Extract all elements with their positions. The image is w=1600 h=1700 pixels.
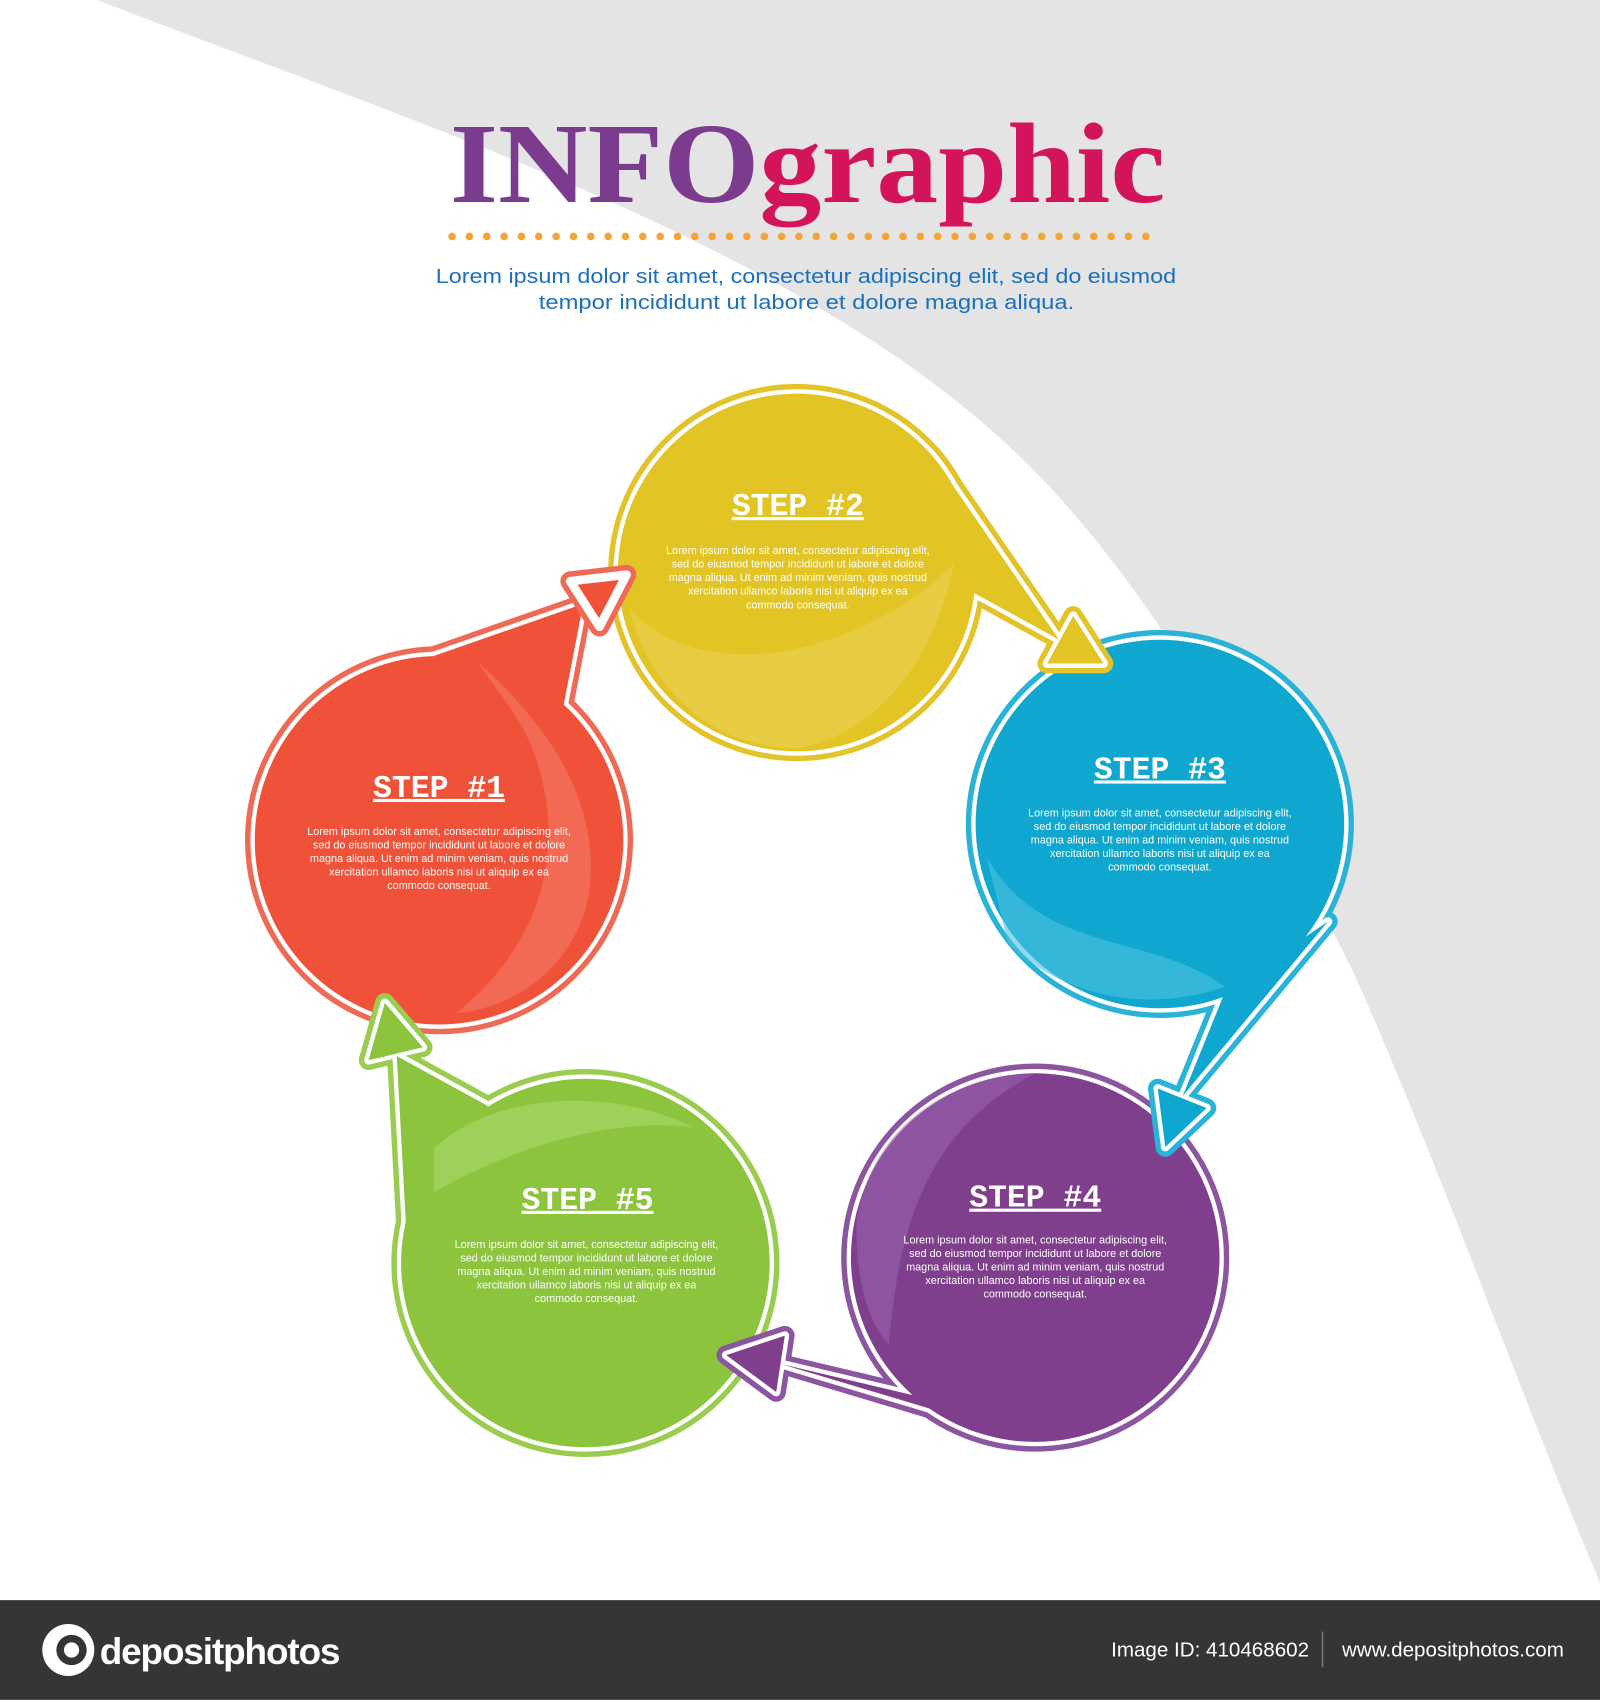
arrow: step 1 head (570, 575, 627, 627)
subtitle: Lorem ipsum dolor sit amet, consectetur adipiscing elit, sed do eiusmod (436, 265, 1176, 288)
footer info: Image ID: 410468602 (1111, 1639, 1309, 1662)
step 3: STEP #3 (1094, 753, 1226, 788)
step 3 (976, 640, 1344, 1147)
title: INFOgraphic (450, 100, 1165, 227)
step 4 (726, 1073, 1220, 1442)
step 2 (618, 394, 1104, 751)
step 1: STEP #1 (373, 772, 505, 807)
footer logo: depositphotos (100, 1631, 339, 1672)
step 1 (255, 575, 627, 1025)
step 5 (369, 1003, 770, 1447)
step 4: STEP #4 (969, 1182, 1101, 1217)
step 2: STEP #2 (732, 490, 864, 525)
subtitle (436, 265, 1176, 314)
footer info: www.depositphotos.com (1341, 1639, 1564, 1662)
subtitle: tempor incididunt ut labore et dolore magna aliqua. (539, 291, 1074, 314)
footer logo (42, 1624, 339, 1676)
footer bar (0, 1600, 1600, 1700)
step 5: STEP #5 (522, 1184, 654, 1219)
footer info (1111, 1632, 1564, 1667)
dotted divider (452, 233, 1151, 240)
